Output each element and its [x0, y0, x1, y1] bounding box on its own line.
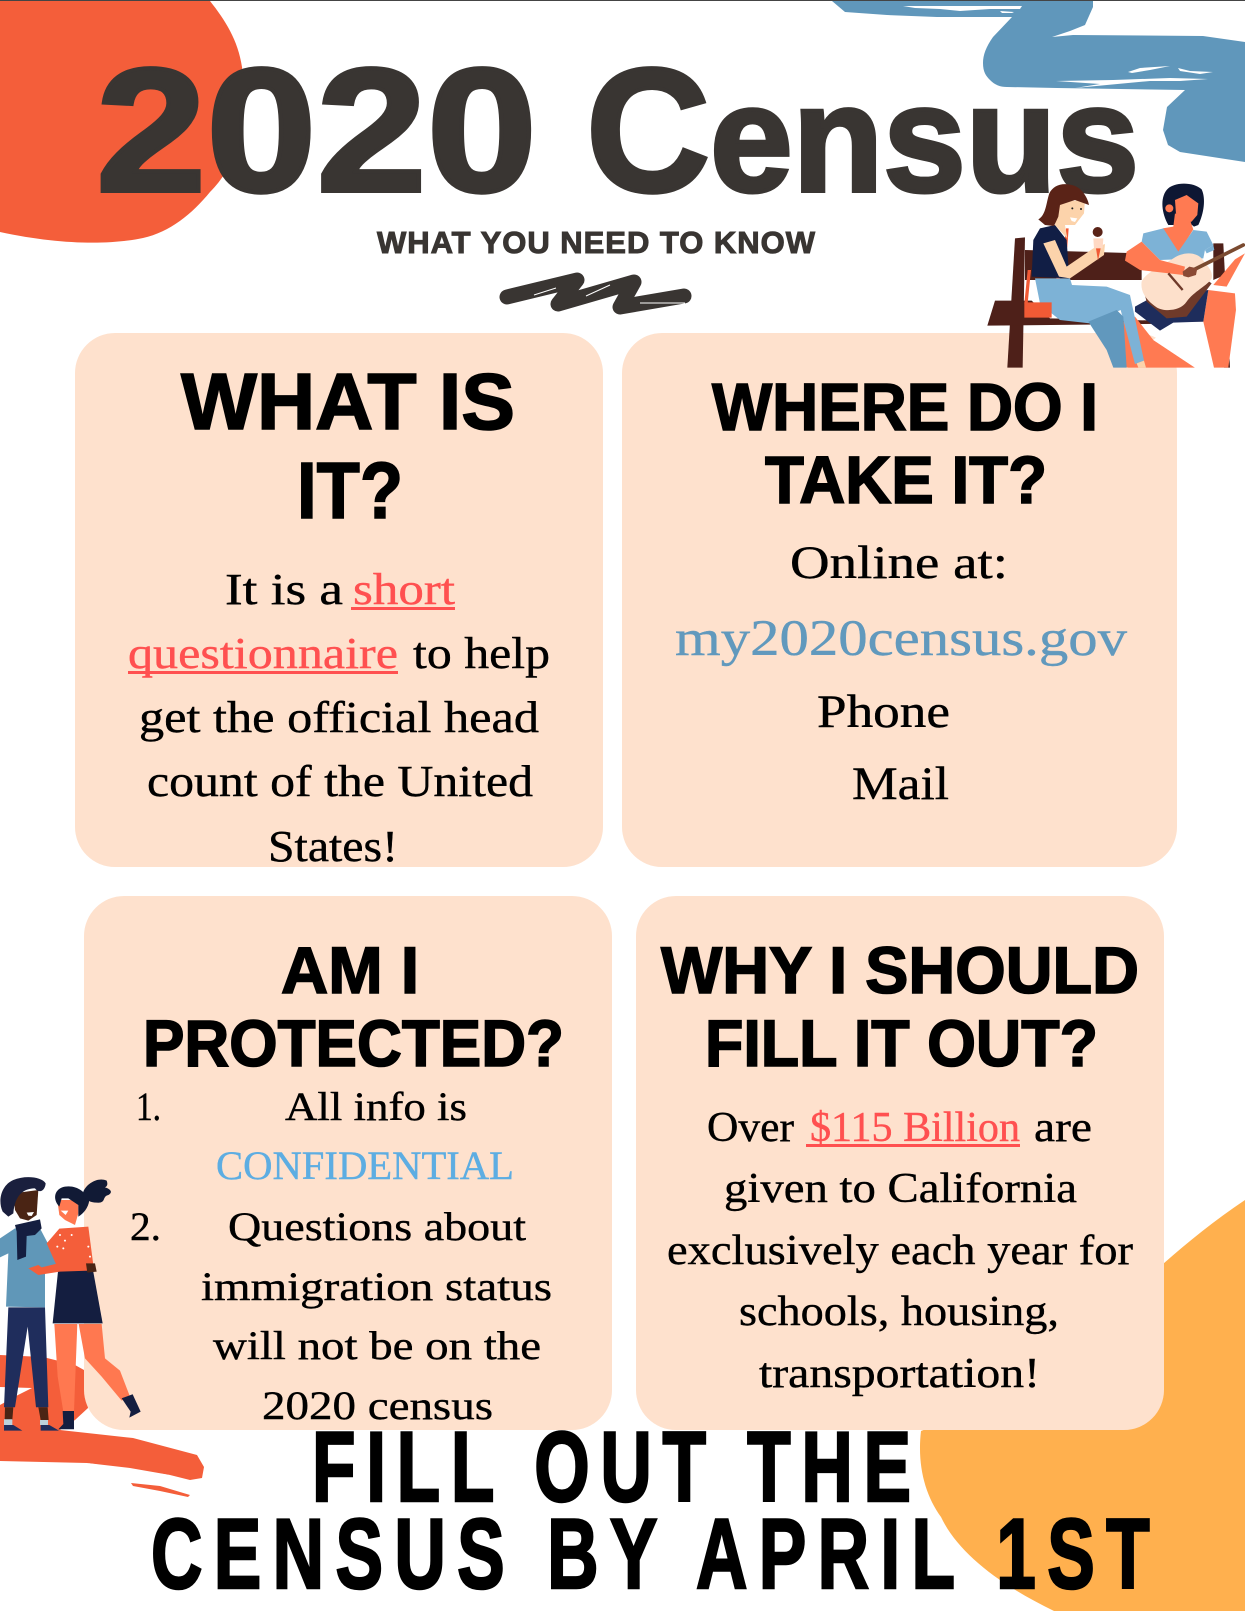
body text: what is it: to help [413, 629, 550, 678]
title: 2020 [96, 33, 537, 229]
title: Census [586, 33, 1139, 229]
numbered list: All info is [285, 1084, 467, 1129]
heading: where do i take it: WHERE DO I [712, 370, 1098, 445]
body text: why i should fill it out: are [1034, 1105, 1092, 1151]
body text: what is it: States! [268, 822, 398, 871]
panel: am i protected [84, 896, 612, 1430]
yellow blob bottom right [920, 1200, 1245, 1611]
heading: why i should fill it out: WHY I SHOULD [661, 933, 1139, 1007]
panel: what is it [75, 333, 603, 871]
body text: what is it [128, 565, 550, 871]
body text: why i should fill it out: $115 Billion [810, 1105, 1020, 1151]
body text: where do i take it: my2020census.gov [675, 611, 1128, 667]
call to action: CENSUS BY APRIL 1ST [151, 1500, 1150, 1610]
title [96, 33, 1139, 229]
body text: what is it: get the official head [139, 693, 539, 742]
body text: where do i take it: Mail [852, 758, 949, 810]
numbered list: CONFIDENTIAL [216, 1143, 514, 1188]
numbered list: 2. [130, 1204, 161, 1249]
heading: am i protected: PROTECTED? [143, 1006, 564, 1080]
orange brush stroke bottom left [0, 1355, 204, 1497]
body text: what is it: It is a [225, 565, 343, 614]
heading: where do i take it [712, 370, 1098, 518]
guitarist far leg [1103, 317, 1215, 368]
numbered list: Questions about [228, 1204, 526, 1249]
body text: why i should fill it out: transportation! [759, 1351, 1040, 1397]
numbered list: will not be on the [213, 1323, 541, 1368]
body text: what is it: count of the United [147, 757, 533, 806]
man [0, 1177, 59, 1431]
subtitle: WHAT YOU NEED TO KNOW [377, 225, 816, 260]
call to action [151, 1413, 1150, 1610]
panel: where do i take it [622, 333, 1177, 867]
heading: am i protected [143, 933, 564, 1080]
illustration: couple walking [0, 1177, 141, 1431]
body text: why i should fill it out: exclusively each year for [667, 1228, 1133, 1274]
body text: why i should fill it out: schools, housing, [739, 1289, 1059, 1335]
woman with ice cream [1024, 184, 1146, 368]
bench [987, 237, 1230, 368]
heading: where do i take it: TAKE IT? [765, 443, 1047, 518]
heading: why i should fill it out: FILL IT OUT? [705, 1006, 1098, 1080]
body text: what is it: short [353, 565, 455, 614]
heading: what is it: WHAT IS [181, 357, 515, 446]
body text: why i should fill it out: given to California [724, 1166, 1077, 1212]
numbered list [130, 1084, 552, 1428]
body text: where do i take it [675, 537, 1128, 810]
woman [28, 1179, 141, 1429]
heading: what is it [181, 357, 515, 535]
guitarist [1125, 184, 1245, 368]
orange blob top left [0, 1, 244, 243]
panel: why i should fill it out [636, 896, 1164, 1430]
body text: where do i take it: Online at: [790, 537, 1008, 589]
body text: what is it: questionnaire [128, 629, 398, 678]
heading: what is it: IT? [297, 446, 403, 535]
call to action: FILL OUT THE [312, 1413, 911, 1523]
numbered list: 1. [136, 1084, 161, 1129]
numbered list: immigration status [201, 1264, 552, 1309]
illustration: couple on bench [987, 184, 1245, 368]
body text: why i should fill it out: Over [707, 1105, 794, 1151]
body text: where do i take it: Phone [817, 686, 950, 738]
heading: am i protected: AM I [281, 933, 419, 1007]
squiggle [507, 280, 685, 307]
blue brush stroke top right [832, 1, 1245, 162]
numbered list: 2020 census [262, 1383, 493, 1428]
heading: why i should fill it out [661, 933, 1139, 1080]
body text: why i should fill it out [667, 1105, 1133, 1397]
